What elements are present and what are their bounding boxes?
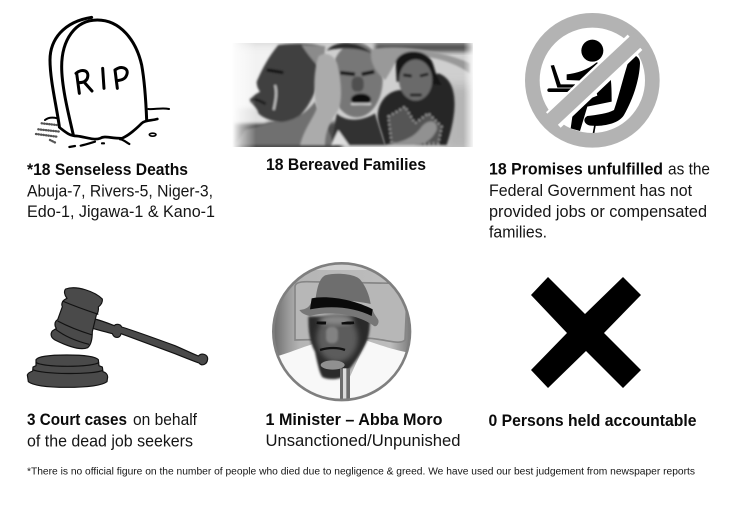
footnote: *There is no official figure on the number of people who died due to negligence & greed. We have used our best judgement from newspaper reports xyxy=(27,466,695,478)
panel: court cases xyxy=(27,288,208,450)
heading: deaths: *18 Senseless Deaths xyxy=(27,161,188,179)
text: promises bold: 18 Promises unfulfilled xyxy=(489,160,663,178)
photo: grieving relatives xyxy=(232,43,475,152)
panel: accountability xyxy=(488,277,696,430)
figure: crying man xyxy=(327,43,385,145)
panel: minister xyxy=(266,262,460,450)
text: deaths by state line 2: Edo-1, Jigawa-1 & Kano-1 xyxy=(27,203,215,221)
figure: raised hand xyxy=(300,54,341,145)
heading: persons accountable: 0 Persons held accountable xyxy=(488,412,696,430)
heading: bereaved families: 18 Bereaved Families xyxy=(266,156,426,174)
text: deaths by state line 1: Abuja-7, Rivers-5, Niger-3, xyxy=(27,182,213,200)
text: promises line 2: Federal Government has not xyxy=(489,182,692,200)
panel: promises unfulfilled xyxy=(489,20,710,242)
photo: Abba Moro portrait xyxy=(272,262,412,403)
figure: weeping woman xyxy=(371,47,470,145)
text: promises line 4: families. xyxy=(489,224,547,242)
text: court cases on behalf: on behalf xyxy=(133,411,197,429)
text: promises line 3: provided jobs or compensated xyxy=(489,203,707,221)
panel: bereaved families xyxy=(232,43,475,174)
figure: man in profile xyxy=(235,44,335,145)
icon: prohibited desk worker xyxy=(532,20,652,140)
icon: gavel xyxy=(27,288,208,387)
text: court cases line 2: of the dead job seekers xyxy=(27,432,193,450)
panel: deaths xyxy=(27,17,215,221)
text: promises as the: as the xyxy=(668,160,710,178)
icon: black X xyxy=(531,277,641,388)
text: court cases bold: 3 Court cases xyxy=(27,411,127,429)
text: unsanctioned: Unsanctioned/Unpunished xyxy=(266,432,460,450)
heading: minister: 1 Minister – Abba Moro xyxy=(266,411,442,429)
icon: RIP tombstone xyxy=(36,17,169,147)
